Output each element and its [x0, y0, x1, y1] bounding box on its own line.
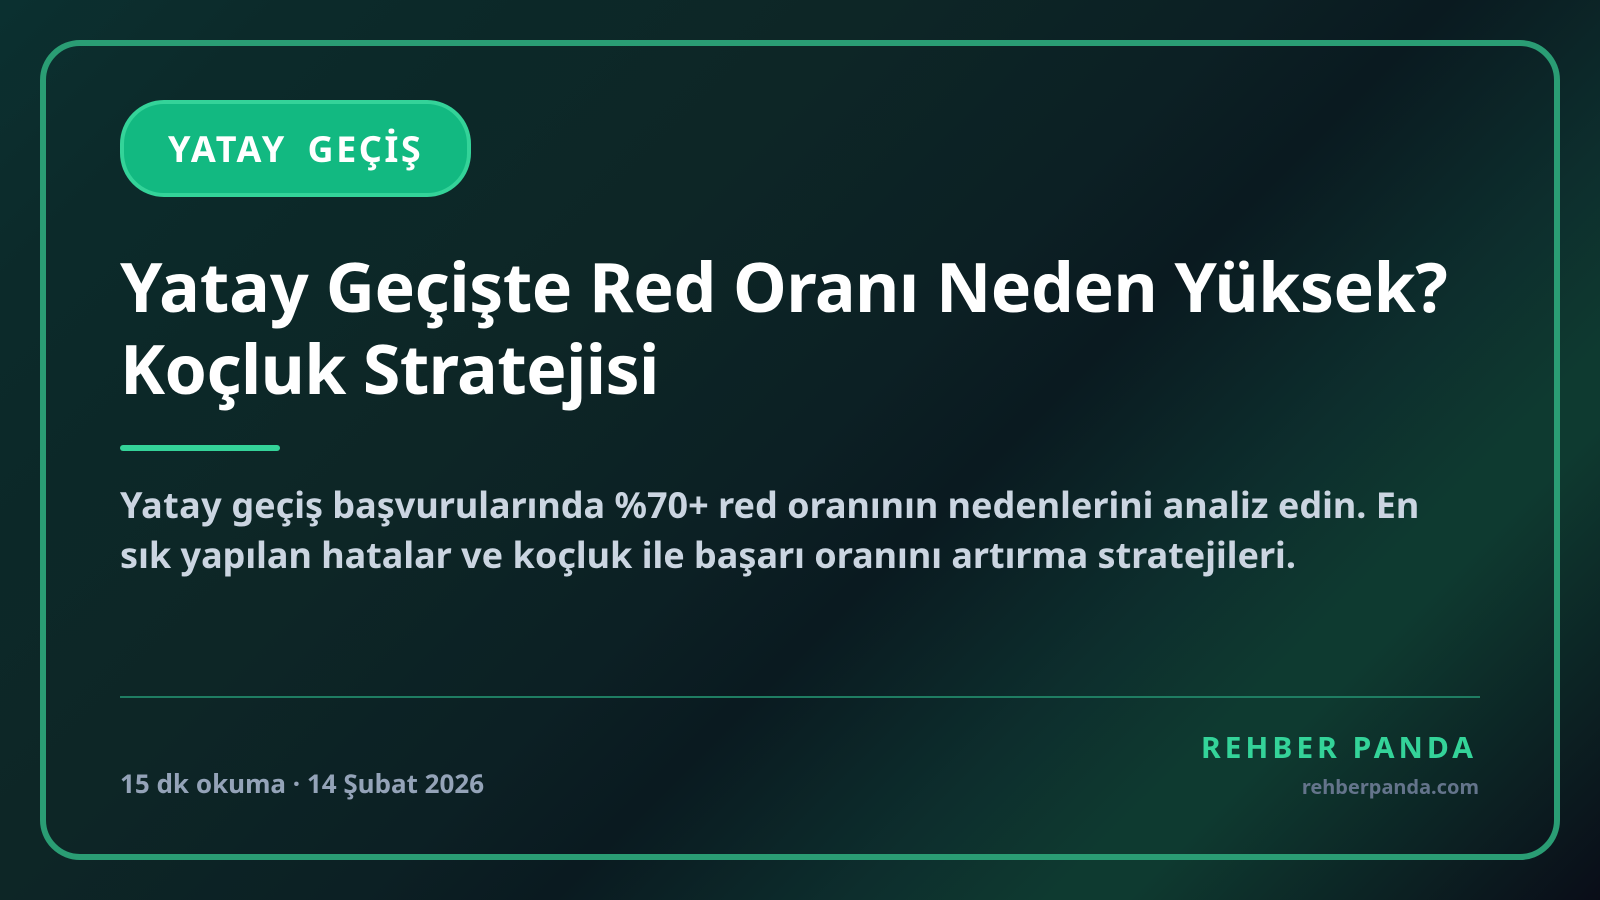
brand name: REHBER PANDA	[1201, 726, 1477, 767]
accent underline	[120, 445, 280, 451]
subtitle text	[120, 480, 1419, 579]
footer divider	[120, 696, 1480, 698]
reading time and date: 15 dk okuma · 14 Şubat 2026	[120, 765, 484, 801]
subtitle text: Yatay geçiş başvurularında %70+ red oranının nedenlerini analiz edin. En	[120, 480, 1419, 529]
title	[120, 239, 1447, 414]
badge: category pill: YATAY GEÇİŞ	[168, 124, 423, 173]
subtitle text: sık yapılan hatalar ve koçluk ile başarı oranını artırma stratejileri.	[120, 530, 1296, 579]
website url: rehberpanda.com	[1302, 773, 1479, 800]
title: Koçluk Stratejisi	[120, 321, 659, 414]
badge: category pill	[120, 100, 471, 197]
title: Yatay Geçişte Red Oranı Neden Yüksek?	[120, 239, 1447, 332]
